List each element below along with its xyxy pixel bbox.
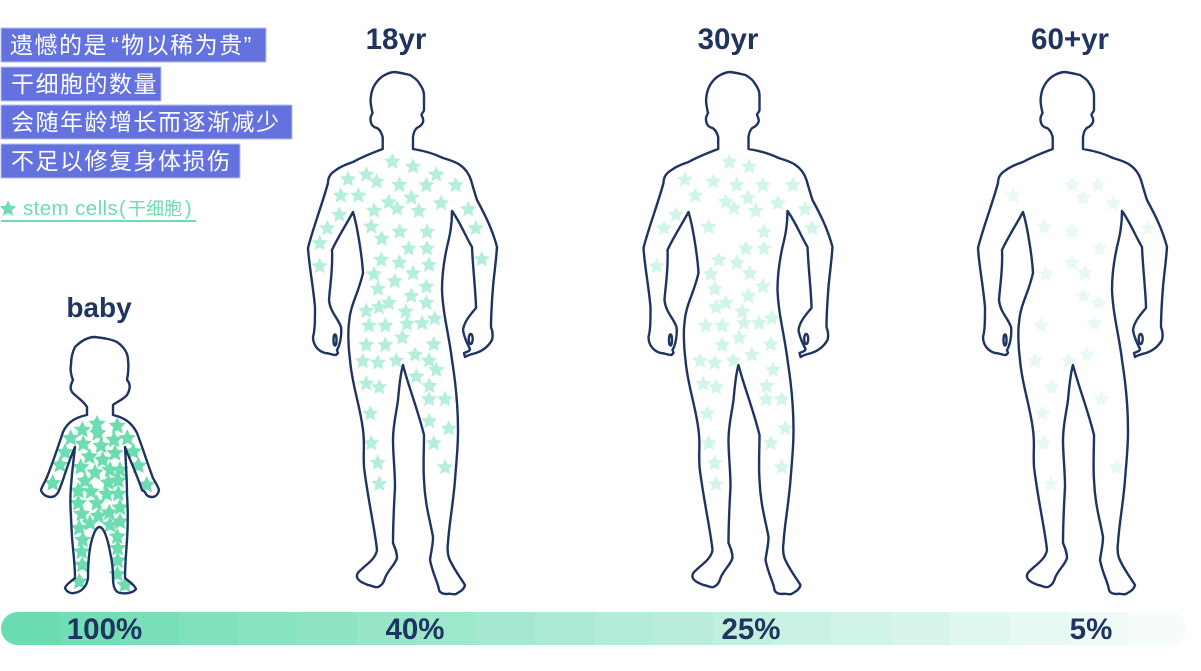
figure label: 30yr: 30yr bbox=[698, 23, 759, 56]
banner line 2: 干细胞的数量 bbox=[11, 71, 158, 97]
legend: stem cells: ( bbox=[119, 198, 126, 220]
value: 100%: 100% bbox=[67, 613, 142, 646]
banner heading bbox=[1, 28, 292, 178]
legend: stem cells: 干细胞 bbox=[128, 199, 182, 219]
figure: 30yr with stem cells bbox=[644, 72, 832, 594]
stars: 60+yr bbox=[1005, 176, 1156, 491]
value: 40%: 40% bbox=[385, 613, 445, 646]
figure: baby with stem cells bbox=[41, 337, 159, 593]
figure label: 18yr: 18yr bbox=[366, 23, 427, 56]
outline: 18yr bbox=[308, 72, 497, 594]
figure: 18yr with stem cells bbox=[308, 72, 497, 594]
legend: stem cells: stem cells bbox=[23, 197, 118, 220]
figure label: 60+yr: 60+yr bbox=[1031, 23, 1109, 56]
outline: baby bbox=[41, 337, 159, 593]
stars: baby bbox=[45, 415, 155, 592]
value: 5%: 5% bbox=[1070, 613, 1112, 646]
figure label: baby: baby bbox=[66, 292, 132, 323]
legend: stem cells: ) bbox=[185, 198, 192, 220]
banner line 4: 不足以修复身体损伤 bbox=[11, 148, 232, 174]
gradient percentage bar bbox=[0, 612, 1188, 646]
legend: stem cells bbox=[0, 197, 196, 222]
banner line 1: 遗憾的是“物以稀为贵” bbox=[10, 32, 253, 58]
outline: 60+yr bbox=[978, 72, 1167, 594]
stars: 18yr bbox=[312, 153, 490, 491]
stars: 30yr bbox=[649, 153, 820, 491]
figure: 60+yr with stem cells bbox=[978, 72, 1167, 594]
outline: 30yr bbox=[644, 72, 832, 594]
value: 25%: 25% bbox=[721, 613, 781, 646]
banner line 3: 会随年龄增长而逐渐减少 bbox=[11, 109, 280, 135]
